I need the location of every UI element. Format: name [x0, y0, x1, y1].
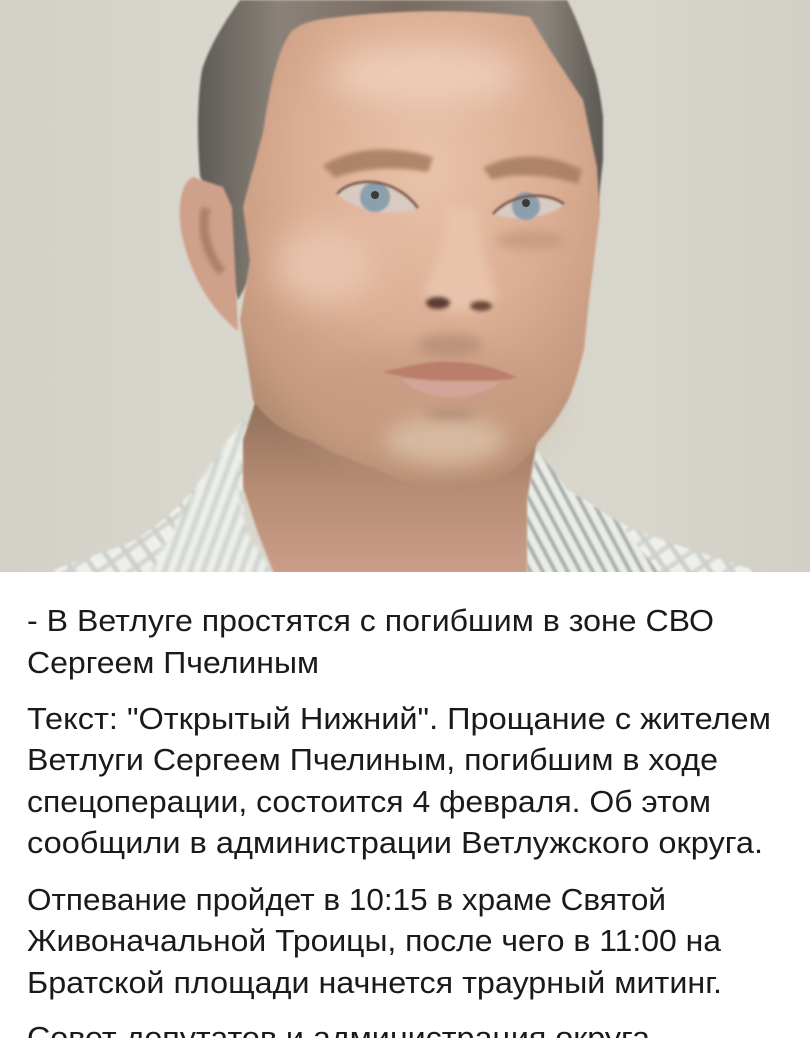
headline text block: [27, 604, 714, 680]
paragraph: farewell announcement: сообщили в администрации Ветлужского округа.: [27, 826, 763, 860]
moustache shadow: [418, 333, 482, 357]
paragraph: ceremony schedule: Братской площади начнется траурный митинг.: [27, 966, 722, 1000]
shirt left collar: [150, 413, 274, 574]
paragraph: farewell announcement: [27, 702, 771, 860]
cheek highlight: [275, 225, 375, 305]
lower face shading: [372, 352, 558, 448]
mouth: [382, 362, 517, 419]
paragraph: ceremony schedule: Живоначальной Троицы, после чего в 11:00 на: [27, 924, 721, 958]
shirt right side: [620, 522, 752, 572]
face: [240, 11, 600, 490]
paragraph: farewell announcement: Текст: "Открытый Нижний". Прощание с жителем: [27, 702, 771, 736]
headline text block: Сергеем Пчелиным: [27, 646, 319, 680]
nose: [424, 205, 496, 312]
shirt right collar: [527, 450, 660, 574]
hair: [198, 0, 603, 300]
neck: [243, 400, 540, 574]
paragraph: ceremony schedule: Отпевание пройдет в 10:15 в храме Святой: [27, 883, 666, 917]
right brow: [483, 157, 582, 184]
left eye: [337, 182, 418, 212]
shirt left side: [54, 416, 248, 572]
right eye: [493, 192, 564, 220]
forehead highlight: [330, 45, 520, 105]
right under-eye shadow: [496, 230, 564, 250]
paragraph: farewell announcement: Ветлуги Сергеем Пчелиным, погибшим в ходе: [27, 743, 718, 777]
paragraph: ceremony schedule: [27, 883, 722, 1000]
headline text block: - В Ветлуге простятся с погибшим в зоне СВО: [27, 604, 714, 638]
left brow: [323, 149, 433, 178]
left ear: [180, 177, 238, 331]
paragraph: farewell announcement: спецоперации, состоится 4 февраля. Об этом: [27, 785, 711, 819]
photo: portrait of a man: [0, 0, 810, 574]
